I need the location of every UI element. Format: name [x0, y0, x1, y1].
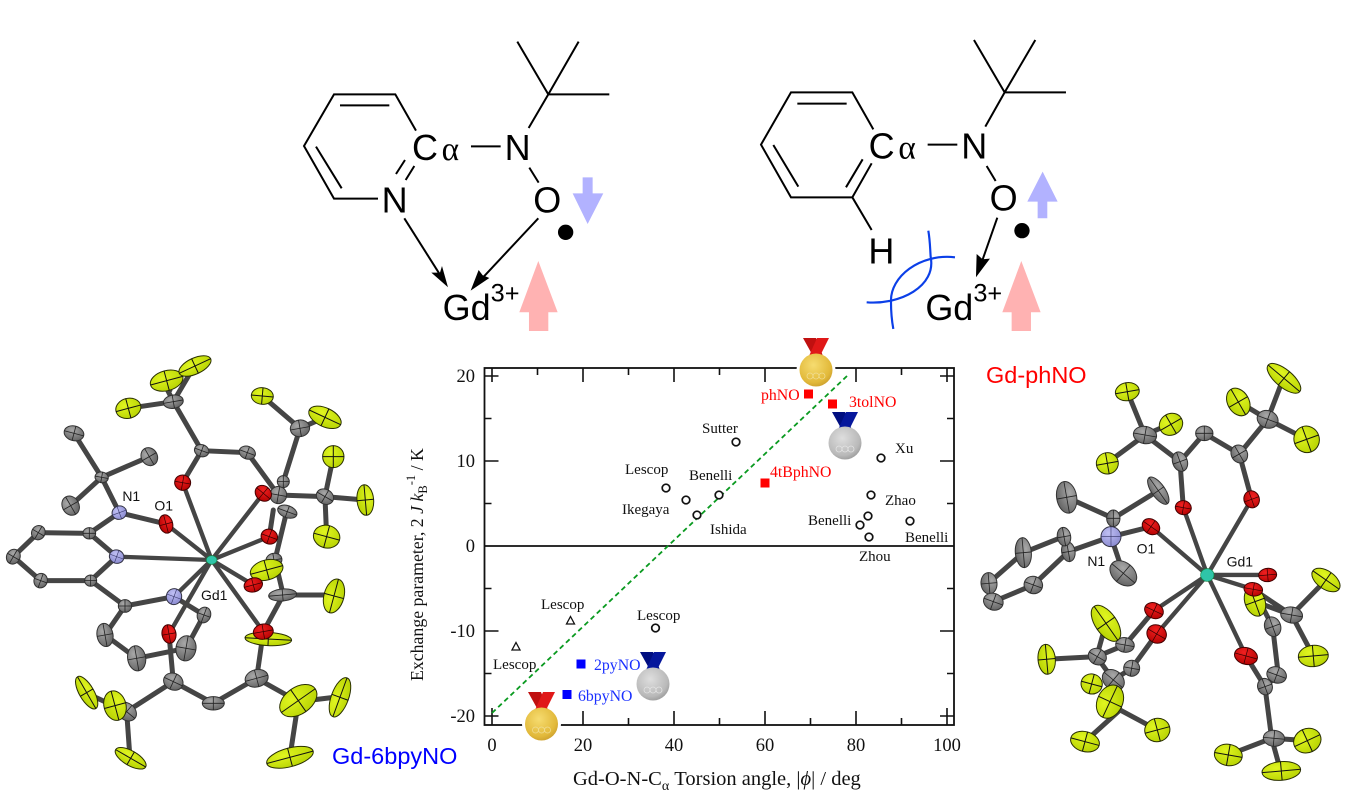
data point labels: Benelli	[905, 530, 948, 546]
atom label Gd1: Gd1	[1227, 554, 1253, 570]
medal: gold bottom	[522, 692, 561, 744]
x axis numbers: 80	[847, 736, 865, 756]
x axis title: Torsion angle, |	[669, 768, 801, 790]
atom label N1: N1	[1087, 553, 1105, 569]
oxygen atoms	[157, 474, 280, 644]
atom label: pyridine nitrogen: N	[382, 179, 408, 220]
data point labels: Lescop	[625, 462, 668, 478]
spin arrow: radical up	[1027, 172, 1058, 218]
chart: exchange parameter vs torsion angle	[404, 338, 961, 794]
label: Gd 3+: 3+	[491, 280, 520, 308]
Gd coordination bonds	[117, 483, 269, 634]
red compound labels: 3tolNO	[849, 394, 896, 411]
red compound labels: phNO	[761, 387, 800, 404]
atom label: nitrogen: N	[505, 127, 531, 168]
structure: phenyl nitroxide Gd complex	[761, 40, 1066, 331]
data point labels: Lescop	[493, 657, 536, 673]
circle data points	[652, 438, 914, 632]
data point labels: Zhou	[859, 549, 891, 565]
atom label: C alpha: Cα	[412, 127, 459, 168]
coordination arrow O to Gd	[976, 218, 997, 277]
y axis numbers: -20	[450, 707, 475, 727]
crystal structure: Gd-phNO	[980, 358, 1344, 782]
gadolinium atom	[206, 556, 217, 564]
x axis numbers	[487, 736, 961, 756]
label: Gd 3+: Gd	[443, 287, 491, 328]
steric repulsion arcs	[867, 231, 955, 329]
data point labels	[493, 421, 948, 673]
trend line	[492, 376, 847, 713]
data point labels: Xu	[895, 441, 914, 457]
x axis numbers: 100	[933, 736, 961, 756]
y axis numbers: 20	[456, 367, 475, 387]
ligand bonds	[13, 365, 365, 758]
atom label N1: N1	[122, 488, 140, 504]
label: Gd 3+: Gd	[925, 287, 973, 328]
x axis numbers: 0	[487, 736, 497, 756]
x axis title: ϕ| / deg	[801, 768, 861, 790]
axis ticks	[484, 368, 954, 725]
blue square data points	[562, 660, 586, 699]
data point labels: Sutter	[702, 421, 738, 437]
nitrogen atom	[1101, 527, 1121, 547]
data point labels: Zhao	[885, 493, 916, 509]
x axis title: Gd-O-N-C	[573, 768, 662, 790]
medal: silver bottom	[636, 652, 670, 700]
data point labels: Lescop	[541, 597, 584, 613]
atom label: nitrogen: N	[961, 126, 987, 167]
spin arrow: radical down	[573, 177, 603, 224]
red compound labels	[761, 387, 896, 481]
structure: pyridyl nitroxide Gd complex	[304, 42, 609, 331]
triangle data points	[512, 616, 574, 650]
Gd coordination bonds	[1151, 499, 1268, 656]
atom label O1: O1	[154, 498, 173, 514]
gadolinium atom	[1201, 569, 1214, 581]
crystal structure: Gd-6bpyNO	[4, 351, 375, 773]
y axis numbers: 10	[456, 452, 475, 472]
ligand bonds	[988, 378, 1326, 771]
y axis numbers	[450, 367, 475, 727]
radical dot	[1014, 223, 1030, 238]
red square data points	[760, 390, 837, 488]
y axis title: -1	[404, 475, 418, 485]
data point labels: Ishida	[710, 522, 747, 538]
carbon atoms	[980, 408, 1304, 747]
coordination arrow O to Gd	[471, 218, 538, 291]
blue compound labels	[578, 657, 641, 705]
y axis numbers: 0	[466, 537, 475, 557]
data point labels: Benelli	[689, 468, 732, 484]
spin arrow: Gd up	[1002, 261, 1041, 331]
fluorine atoms	[71, 351, 375, 773]
radical dot	[558, 225, 573, 240]
data point labels: Ikegaya	[622, 502, 670, 518]
x axis numbers: 40	[665, 736, 683, 756]
y axis title: Exchange parameter, 2 J k	[407, 494, 427, 681]
plot frame	[484, 368, 954, 725]
atom label: oxygen: O	[533, 179, 561, 220]
atom label Gd1: Gd1	[201, 587, 228, 603]
label: Gd 3+: 3+	[973, 280, 1002, 308]
carbon atoms	[4, 393, 336, 725]
y axis numbers: -10	[450, 622, 475, 642]
x axis numbers: 60	[756, 736, 774, 756]
data point labels: Lescop	[637, 608, 680, 624]
y axis title: / K	[407, 448, 427, 475]
atom label: oxygen: O	[990, 178, 1018, 219]
atom label O1: O1	[1137, 540, 1156, 556]
medal: gold top	[796, 338, 836, 390]
x axis title: α	[662, 779, 670, 794]
x axis numbers: 20	[574, 736, 592, 756]
blue compound labels: 2pyNO	[594, 657, 641, 674]
fluorine atoms	[1037, 358, 1344, 782]
nitrogen atoms	[107, 504, 184, 607]
phenyl ring and tert-butyl skeleton	[761, 40, 1066, 230]
label: Gd-phNO: Gd-phNO	[986, 362, 1087, 388]
medal: silver top	[828, 412, 862, 460]
red compound labels: 4tBphNO	[770, 464, 831, 481]
label: Gd-6bpyNO: Gd-6bpyNO	[332, 743, 457, 769]
atom label: hydrogen: H	[868, 230, 894, 271]
oxygen atoms	[1139, 489, 1277, 667]
zero line	[484, 545, 954, 547]
y axis title: B	[416, 485, 430, 494]
atom label: C alpha: Cα	[869, 126, 916, 167]
pyridine ring and tert-butyl skeleton	[304, 42, 609, 199]
spin arrow: Gd up	[519, 261, 558, 331]
data point labels: Benelli	[808, 513, 851, 529]
blue compound labels: 6bpyNO	[578, 688, 632, 705]
coordination arrow N to Gd	[404, 218, 448, 287]
